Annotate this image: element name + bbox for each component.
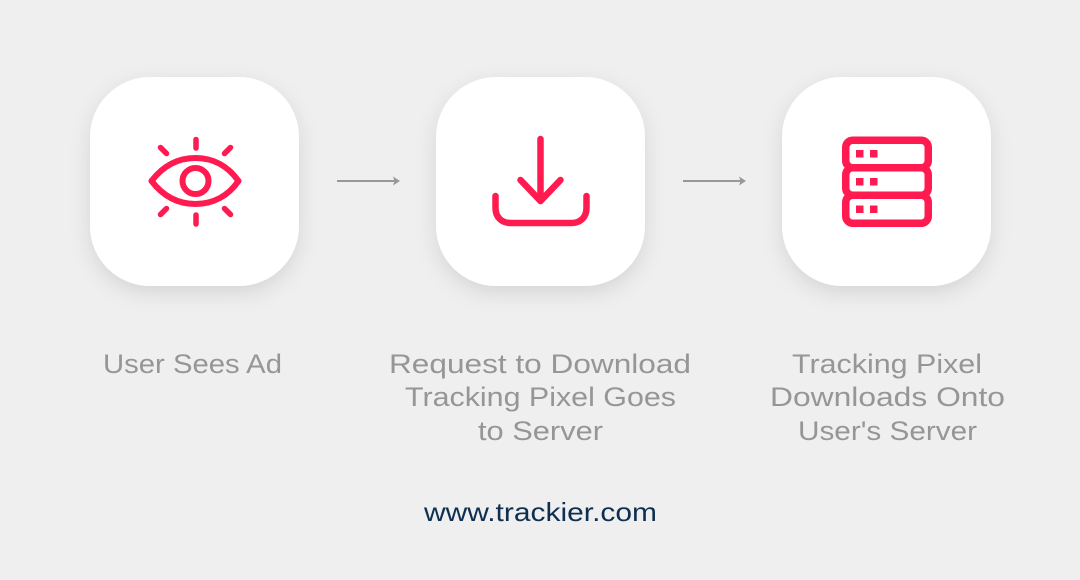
icon: eye <box>152 140 238 224</box>
caption: user sees ad: User Sees Ad <box>103 349 282 379</box>
panel: user sees ad card <box>90 77 299 286</box>
icon: server stack <box>846 140 928 223</box>
caption: request to download: Request to Download <box>389 349 691 379</box>
arrow: second to third <box>683 176 746 186</box>
caption: request to download: Tracking Pixel Goes <box>405 382 676 412</box>
caption: tracking pixel downloads <box>770 349 1005 446</box>
footer: website url: www.trackier.com <box>423 497 657 527</box>
panel: download request card <box>436 77 645 286</box>
caption: request to download <box>389 349 691 446</box>
caption: tracking pixel downloads: Tracking Pixel <box>792 349 982 379</box>
panel: server card <box>782 77 991 286</box>
arrow: first to second <box>337 176 400 186</box>
caption: tracking pixel downloads: Downloads Onto <box>770 382 1005 412</box>
caption: request to download: to Server <box>478 416 603 446</box>
caption: tracking pixel downloads: User's Server <box>798 416 977 446</box>
icon: download <box>496 139 586 223</box>
